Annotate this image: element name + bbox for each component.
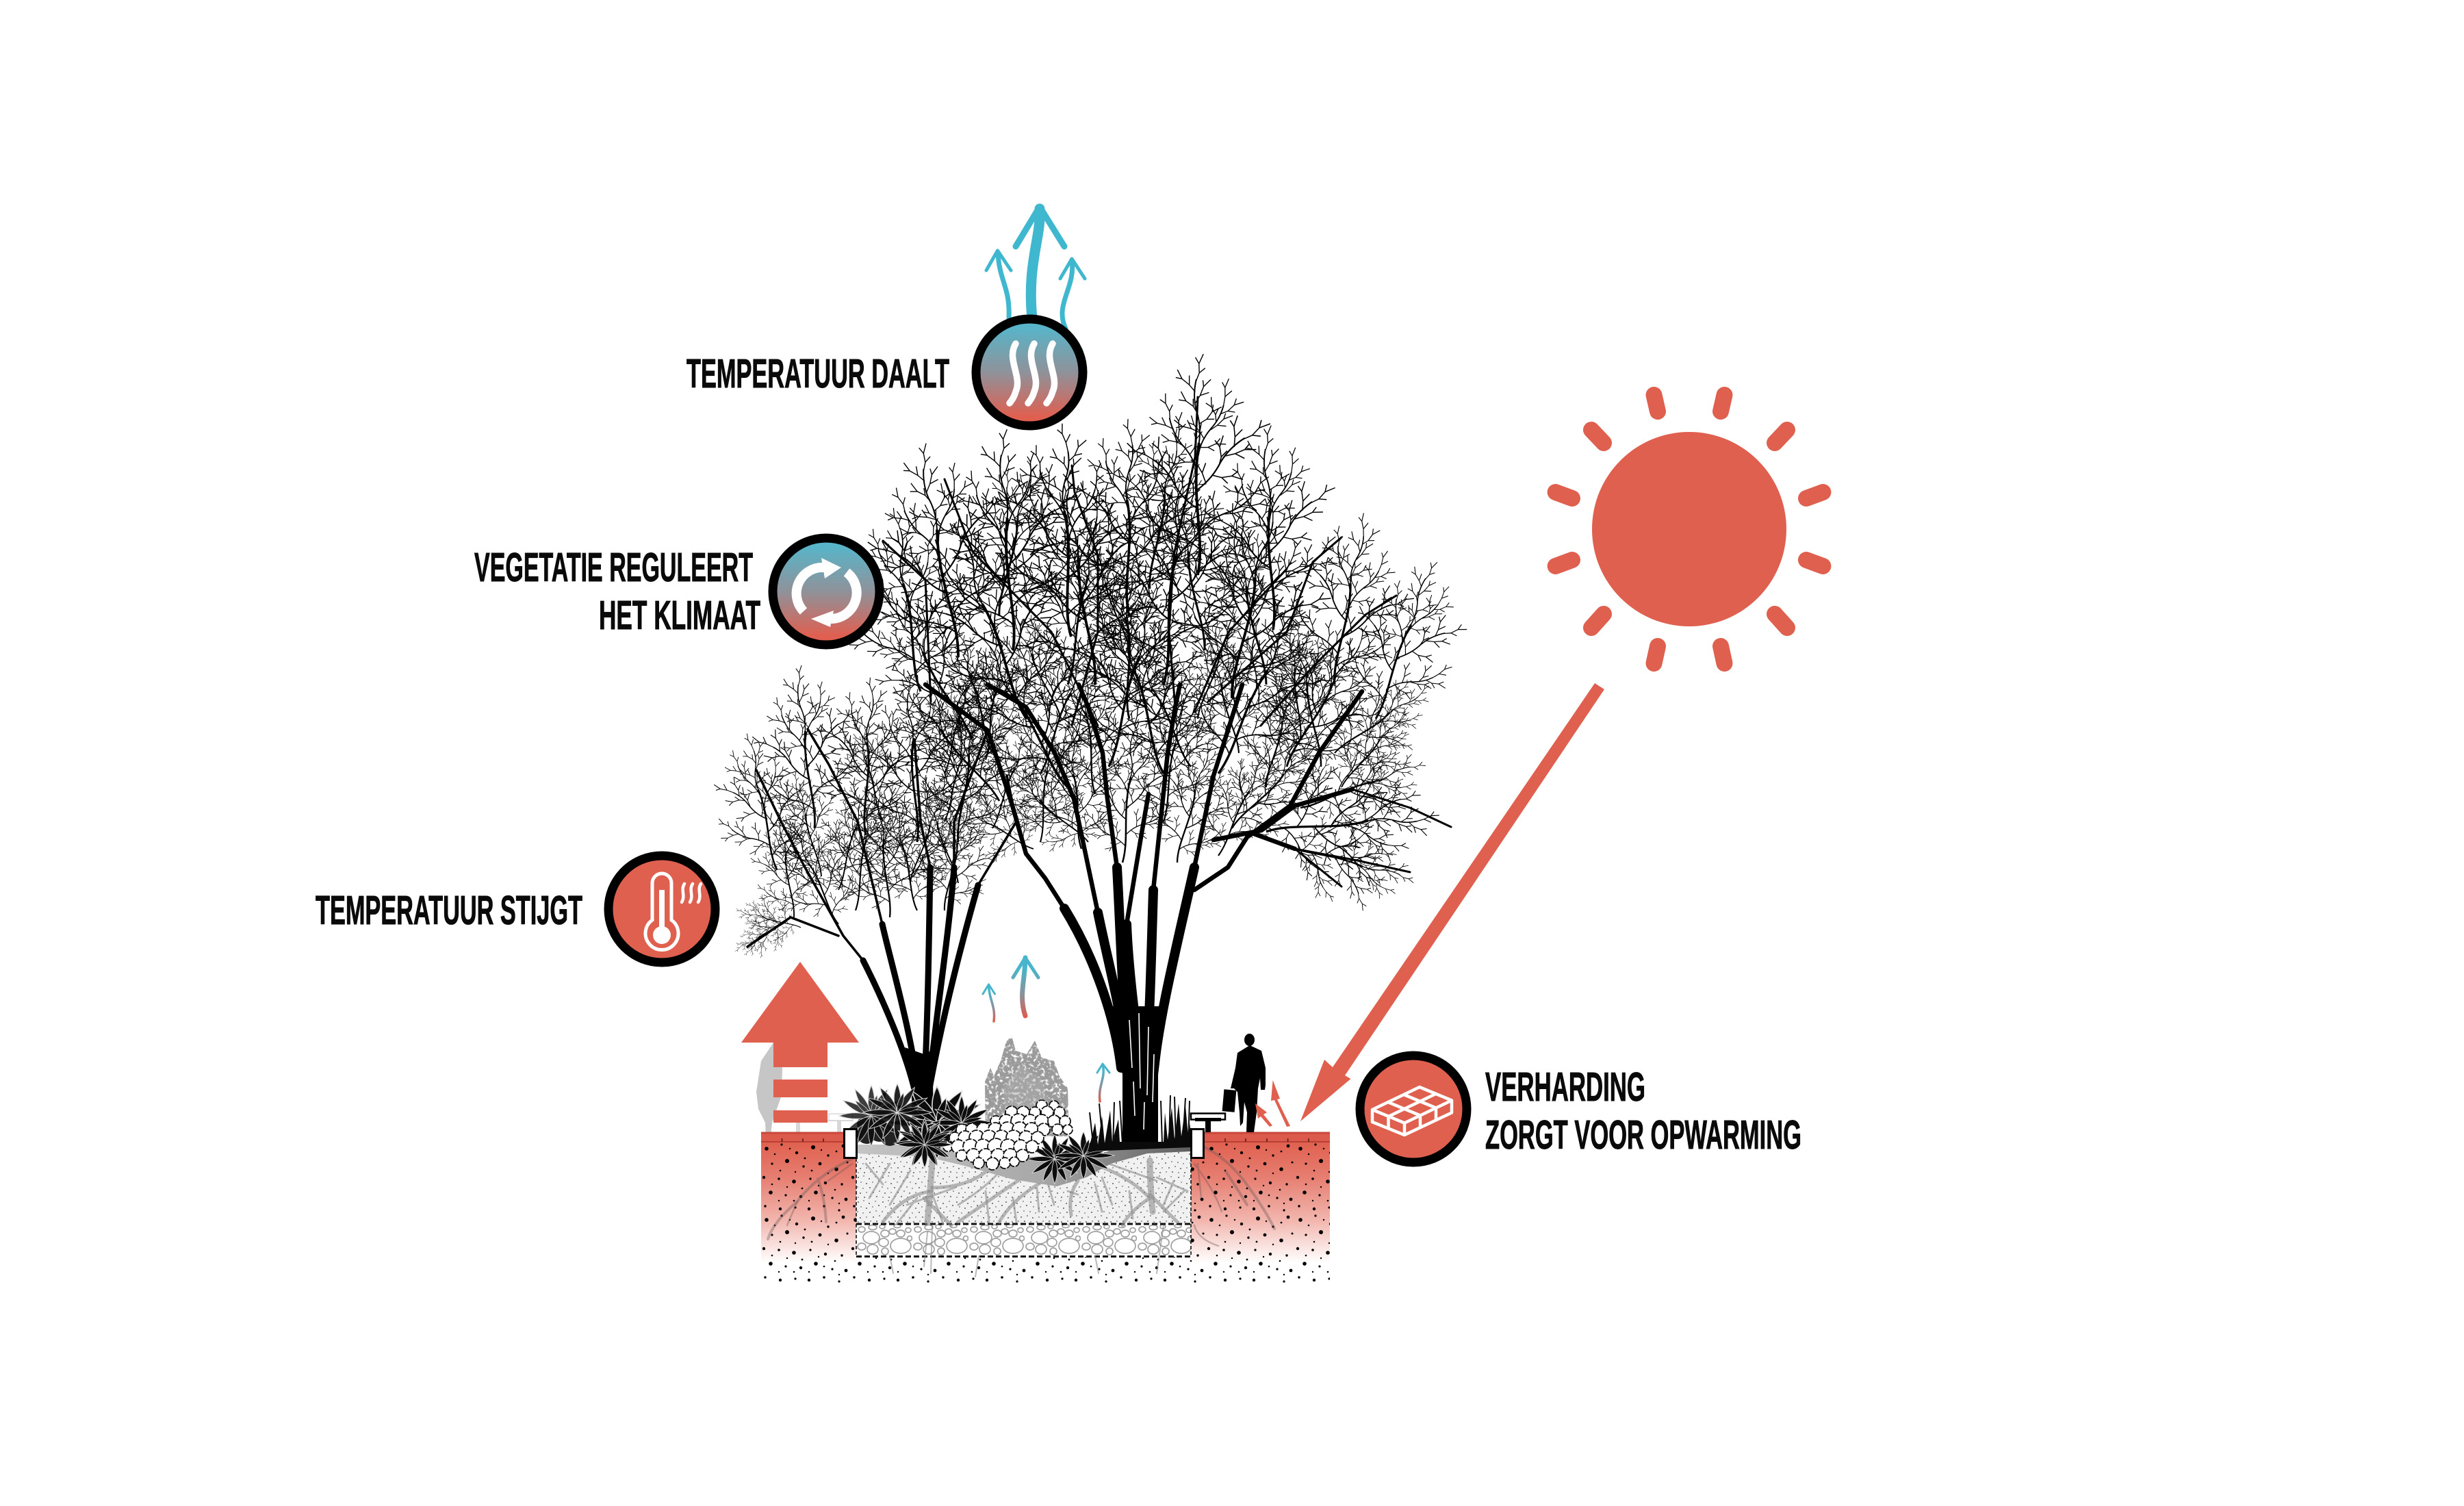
woman silhouette [756, 1043, 782, 1136]
icon: thermometer [608, 856, 715, 962]
label: temperatuur daalt: TEMPERATUUR DAALT [686, 351, 949, 396]
right curb [1191, 1130, 1203, 1158]
arrow: heat reflecting small 1 [1255, 1103, 1272, 1127]
left tree trunk [905, 1047, 938, 1143]
agave plants [838, 1084, 1114, 1184]
bench right [1191, 1113, 1225, 1132]
main tree twigs [815, 352, 1497, 931]
white curly shrub [943, 1100, 1073, 1170]
arrow: small evaporation right [1097, 1064, 1109, 1101]
front agave [897, 1121, 952, 1168]
icon: sun [1556, 395, 1823, 663]
mulch layer [856, 1145, 1190, 1186]
left curb [845, 1130, 857, 1158]
main tree branches [883, 397, 1451, 1068]
gray bush behind plants [985, 1036, 1069, 1136]
label: vegetatie reguleert het klimaat: HET KLIMAAT [599, 593, 760, 638]
icon: climate cycle [773, 538, 880, 645]
ground section [761, 1084, 1330, 1284]
label: vegetatie reguleert het klimaat: VEGETATIE REGULEERT [474, 545, 753, 590]
arrow: sun radiation to pavement [1300, 683, 1604, 1121]
roots [866, 1160, 1188, 1277]
arrow: heat reflecting small 2 [1271, 1080, 1290, 1127]
bench left [798, 1114, 853, 1132]
arrow: small evaporation left [983, 984, 995, 1021]
label: verharding zorgt voor opwarming [1485, 1064, 1801, 1158]
label: verharding zorgt voor opwarming: ZORGT VOOR OPWARMING [1485, 1112, 1801, 1158]
grass tuft right of tree [1088, 1095, 1190, 1151]
soil blocks red [761, 1142, 1330, 1284]
arrow: small evaporation centre [1013, 958, 1038, 1016]
label: vegetatie reguleert het klimaat [474, 545, 760, 638]
pavement surface [761, 1132, 1330, 1142]
left tree twigs [689, 657, 1070, 973]
tree: small left tree [689, 657, 1070, 1143]
left dark low shrub [857, 1113, 899, 1146]
layer dashed lines [856, 1158, 1191, 1257]
label: verharding zorgt voor opwarming: VERHARDING [1485, 1064, 1645, 1110]
main tree trunk [1112, 1006, 1166, 1145]
arrow: heat rising from pavement [741, 962, 859, 1123]
sand layer [856, 1150, 1191, 1224]
arrows: cool air rising [986, 207, 1085, 329]
icon: steam temperature falls [976, 319, 1083, 426]
gravel layer [856, 1224, 1191, 1256]
person silhouette with briefcase [1222, 1034, 1266, 1132]
roots in paved soil [768, 1143, 1274, 1246]
left tree limbs [747, 729, 1016, 1095]
tree: large main tree [815, 352, 1497, 1145]
icon: paving bricks [1360, 1056, 1467, 1162]
label: temperatuur stijgt: TEMPERATUUR STIJGT [316, 888, 582, 933]
